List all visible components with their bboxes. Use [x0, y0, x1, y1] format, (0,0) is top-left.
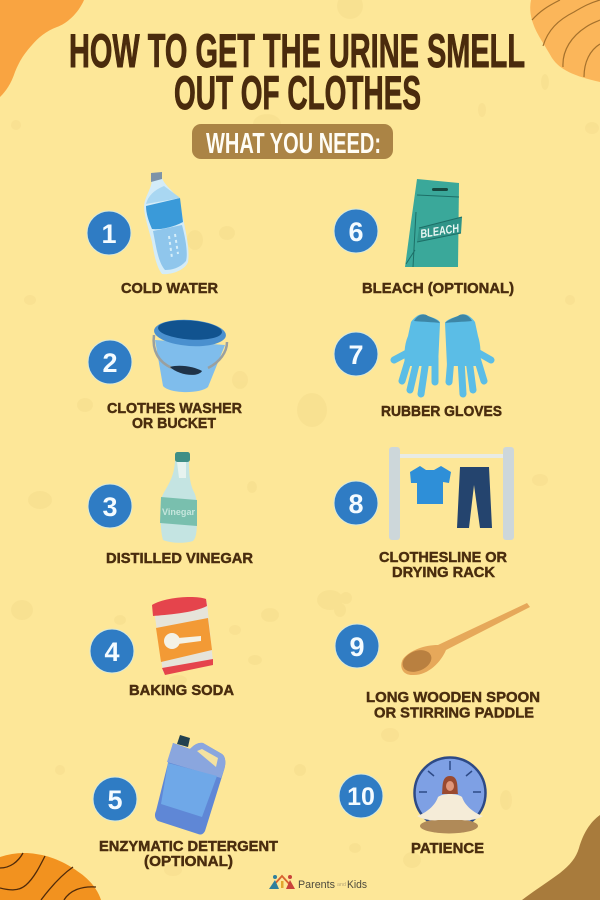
item 7: rubber gloves [334, 314, 502, 420]
badge 4: 4 [104, 637, 120, 667]
badge 9 [335, 624, 379, 668]
item 3: distilled vinegar [88, 452, 254, 567]
decorative corner blob: top right [530, 0, 600, 82]
decorative corner blob: top left [0, 0, 84, 97]
label: clothes washer or bucket: OR BUCKET [132, 416, 216, 432]
badge 5 [93, 777, 137, 821]
label: enzymatic detergent optional: ENZYMATIC DETERGENT [99, 839, 278, 855]
badge 2 [88, 340, 132, 384]
icon: drying rack with clothes [389, 447, 514, 540]
badge 3 [88, 484, 132, 528]
item 2: clothes washer or bucket [88, 318, 243, 432]
badge 10 [339, 774, 383, 818]
label: rubber gloves: RUBBER GLOVES [381, 404, 502, 420]
icon: meditating woman with clock [414, 758, 486, 834]
label: long wooden spoon or stirring paddle: LONG WOODEN SPOON [366, 690, 540, 706]
badge 6: 6 [348, 217, 364, 247]
icon: bleach bag [405, 179, 462, 267]
icon: bucket [153, 318, 227, 392]
logo: parents and kids: and [337, 882, 346, 888]
label: cold water: COLD WATER [121, 281, 219, 297]
decorative corner blob: bottom right [522, 815, 600, 900]
subtitle pill: what you need: WHAT YOU NEED: [206, 128, 381, 160]
title: OUT OF CLOTHES [174, 66, 421, 119]
badge 3: 3 [102, 492, 118, 522]
badge 1: 1 [101, 219, 117, 249]
icon: detergent jug [155, 735, 225, 835]
icon: bleach bag: BLEACH [419, 221, 460, 241]
badge 8: 8 [348, 489, 364, 519]
logo: parents and kids: Parents [298, 879, 335, 891]
label: long wooden spoon or stirring paddle: OR STIRRING PADDLE [374, 706, 534, 722]
label: patience: PATIENCE [411, 841, 484, 857]
title [69, 24, 525, 119]
item 9: long wooden spoon [335, 603, 540, 722]
badge 8 [334, 481, 378, 525]
label: clothes washer or bucket [107, 401, 243, 432]
badge 2: 2 [102, 348, 118, 378]
label: clothesline or drying rack: DRYING RACK [392, 565, 496, 581]
label: long wooden spoon or stirring paddle [366, 690, 540, 722]
icon: vinegar bottle: Vinegar [162, 507, 195, 517]
item 1: cold water [87, 172, 219, 297]
item 5: enzymatic detergent [93, 735, 278, 870]
label: bleach optional: BLEACH (OPTIONAL) [362, 281, 514, 297]
icon: rubber gloves [394, 314, 491, 394]
icon: water bottle [144, 172, 189, 274]
item 10: patience [339, 758, 486, 857]
badge 7: 7 [348, 340, 364, 370]
logo: parents and kids [269, 875, 367, 891]
item 8: clothesline or drying rack [334, 447, 514, 581]
badge 9: 9 [349, 632, 365, 662]
label: distilled vinegar: DISTILLED VINEGAR [106, 551, 254, 567]
item 4: baking soda [90, 597, 235, 699]
label: clothes washer or bucket: CLOTHES WASHER [107, 401, 243, 417]
badge 10: 10 [347, 783, 375, 811]
item 6: bleach [334, 179, 514, 297]
badge 4 [90, 629, 134, 673]
icon: baking soda can [152, 597, 213, 675]
icon: wooden spoon [399, 603, 530, 676]
subtitle pill: what you need [192, 124, 393, 160]
logo: parents and kids: Kids [347, 879, 367, 891]
label: clothesline or drying rack: CLOTHESLINE OR [379, 550, 508, 566]
icon: vinegar bottle [160, 452, 197, 543]
label: baking soda: BAKING SODA [129, 683, 235, 699]
label: enzymatic detergent optional: (OPTIONAL) [144, 854, 233, 870]
badge 6 [334, 209, 378, 253]
badge 5: 5 [107, 785, 123, 815]
label: clothesline or drying rack [379, 550, 508, 581]
decorative corner blob: bottom left [0, 853, 101, 900]
label: enzymatic detergent optional [99, 839, 278, 870]
badge 7 [334, 332, 378, 376]
